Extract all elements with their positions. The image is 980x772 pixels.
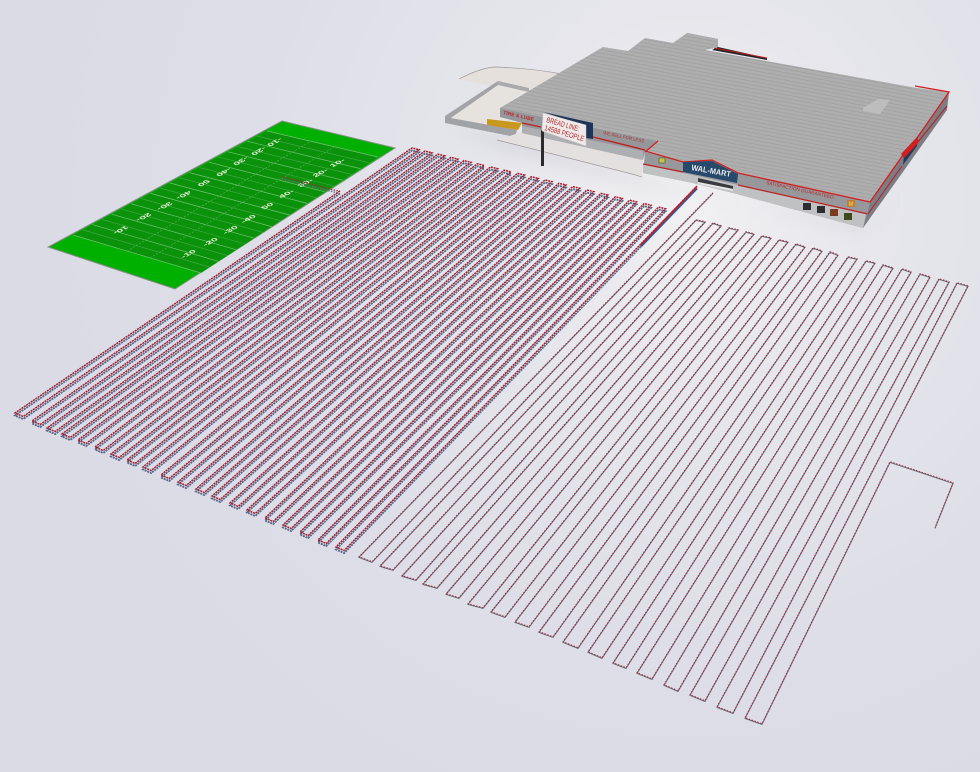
yellow awning bbox=[487, 119, 522, 130]
wing lower band bbox=[522, 126, 643, 160]
field numbers: near sideline: -10 bbox=[178, 248, 198, 259]
field numbers: far sideline: -20 bbox=[249, 146, 269, 157]
billboard face bbox=[542, 113, 586, 146]
store shadow bbox=[445, 125, 900, 232]
right wall stripe bbox=[868, 106, 947, 214]
left wing wall bbox=[500, 108, 658, 160]
field numbers: far sideline: -30 bbox=[231, 156, 251, 167]
field numbers: near sideline bbox=[178, 157, 347, 259]
queue tail on field bbox=[282, 177, 338, 193]
roof bbox=[500, 33, 949, 202]
front sidewalk bbox=[497, 132, 643, 176]
billboard line two: 14588 PEOPLE bbox=[543, 123, 585, 143]
field numbers: far sideline bbox=[111, 137, 285, 236]
entrance doors bbox=[698, 178, 733, 191]
field numbers: near sideline: 40- bbox=[276, 188, 296, 199]
walmart sign panel bbox=[683, 161, 738, 183]
field numbers: near sideline: -20 bbox=[200, 236, 220, 247]
field numbers: near sideline: 20- bbox=[310, 167, 330, 178]
store: walmart building bbox=[445, 33, 949, 228]
mcdonalds sign: M bbox=[848, 202, 854, 208]
sparse queue block bbox=[359, 193, 968, 724]
satisfaction text: SATISFACTION GUARANTEED bbox=[766, 180, 835, 201]
field numbers: near sideline: 10- bbox=[327, 157, 347, 168]
field numbers: far sideline: 50 bbox=[195, 179, 212, 188]
football field bbox=[48, 121, 395, 289]
field numbers: far sideline: 20- bbox=[134, 212, 154, 223]
field numbers: far sideline: -40 bbox=[214, 167, 234, 178]
shop windows bbox=[803, 203, 852, 220]
back wall stub bbox=[687, 33, 767, 60]
field numbers: near sideline: -40 bbox=[238, 213, 258, 224]
wall red stripes bbox=[643, 164, 868, 214]
garden centre fence bbox=[445, 81, 529, 137]
wing slogan: WE SELL FOR LESS bbox=[603, 130, 645, 144]
billboard blue back bbox=[543, 112, 593, 139]
right wall blue sign bbox=[903, 140, 918, 165]
mcdonalds sign bbox=[847, 200, 855, 208]
field numbers: far sideline: 40- bbox=[174, 190, 194, 201]
door line: thick queue end bbox=[641, 186, 697, 246]
billboard line one: BREAD LINE: bbox=[545, 115, 581, 133]
billboard: bread line count bbox=[541, 112, 593, 166]
wall lower band bbox=[643, 164, 866, 228]
garden centre floor bbox=[445, 82, 530, 130]
right wall red flare bbox=[901, 137, 919, 158]
right wall bbox=[863, 92, 949, 228]
dense queue block bbox=[15, 148, 697, 553]
main front wall bbox=[643, 152, 870, 228]
field numbers: near sideline: -30 bbox=[220, 224, 240, 235]
small store sign bbox=[659, 158, 665, 163]
field numbers: far sideline: 30- bbox=[155, 201, 175, 212]
walmart sign text: WAL-MART bbox=[691, 163, 732, 179]
roof red trim bbox=[645, 86, 949, 202]
field numbers: far sideline: -10 bbox=[265, 137, 285, 148]
field numbers: near sideline: 30- bbox=[295, 177, 315, 188]
field numbers: far sideline: 10- bbox=[111, 225, 131, 236]
apron curb bbox=[459, 67, 562, 79]
field numbers: near sideline: 50 bbox=[259, 201, 276, 210]
left wing red stripe bbox=[522, 123, 645, 150]
parking apron outline bbox=[459, 67, 562, 92]
roof vent box bbox=[863, 99, 890, 114]
billboard pole bbox=[541, 130, 544, 166]
tire lube sign: TIRE & LUBE bbox=[503, 110, 535, 123]
